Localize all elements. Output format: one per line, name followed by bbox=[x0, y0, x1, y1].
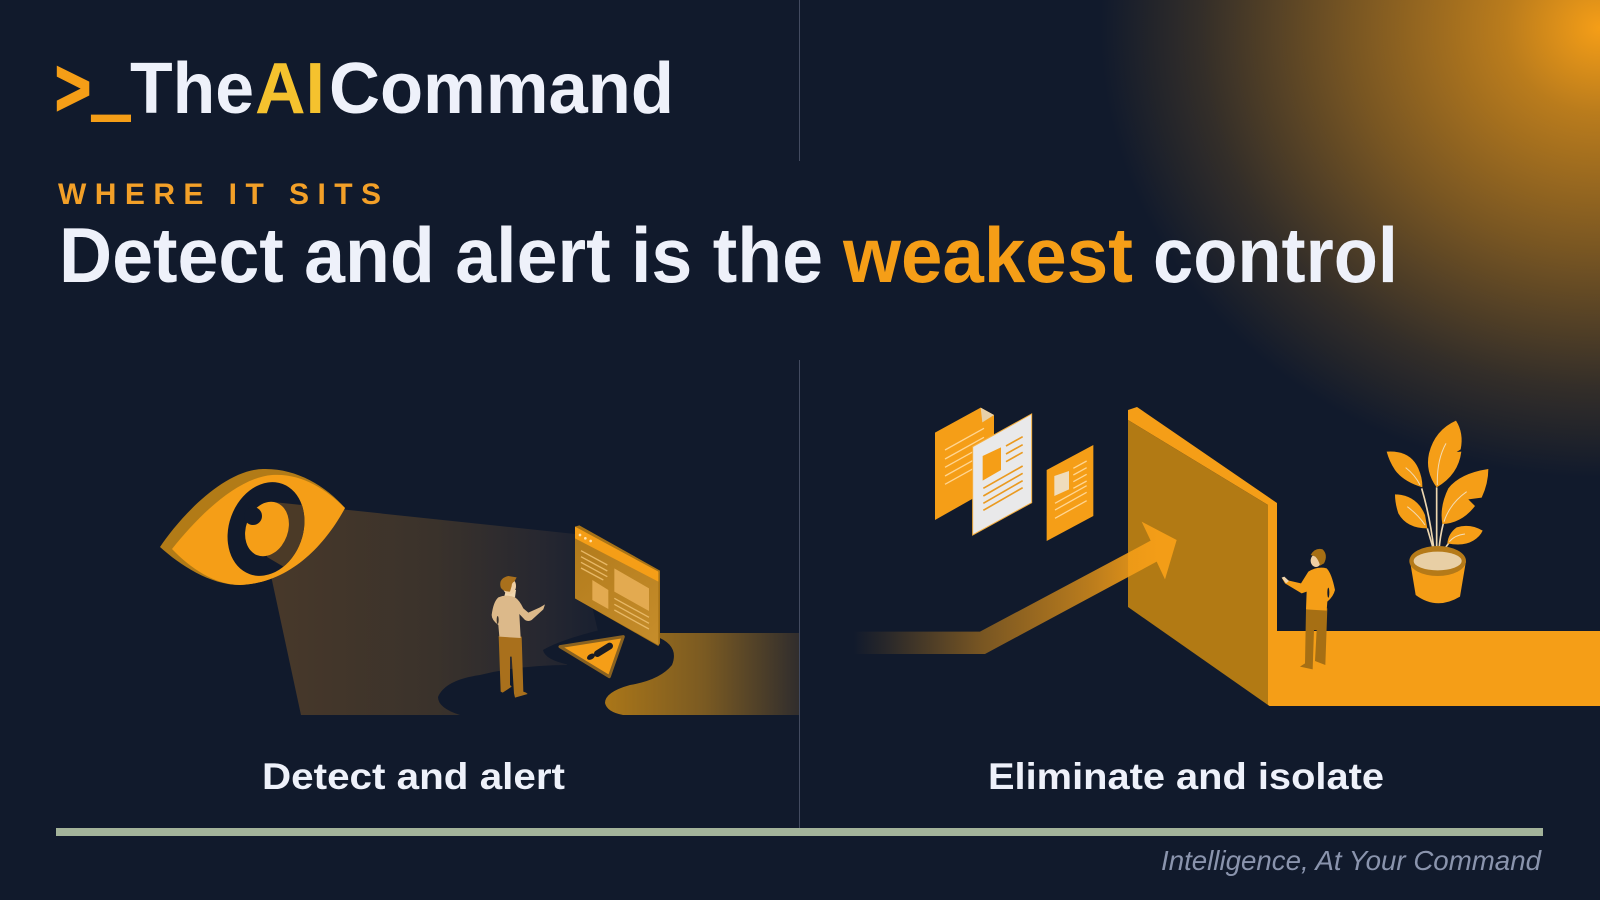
leaf veins bbox=[1406, 443, 1467, 542]
icon: documents bbox=[935, 408, 1093, 541]
document three bbox=[1047, 445, 1093, 541]
icon: potted plant bbox=[1387, 421, 1488, 603]
label: detect and alert: Detect and alert bbox=[262, 756, 565, 797]
logo: > bbox=[55, 43, 91, 132]
ground shadow bbox=[438, 630, 674, 715]
person at wall bbox=[1282, 549, 1335, 669]
icon: browser window bbox=[575, 525, 660, 646]
pot bbox=[1409, 546, 1466, 603]
logo: _ bbox=[92, 29, 130, 129]
icon: eye bbox=[160, 469, 345, 585]
document two bbox=[973, 414, 1032, 535]
blocked arrow bbox=[853, 522, 1177, 654]
title: weakest bbox=[842, 211, 1133, 299]
eyebrow: WHERE IT SITS bbox=[58, 178, 381, 211]
person looking at screen bbox=[492, 576, 545, 698]
title: control bbox=[1153, 211, 1398, 299]
title bbox=[59, 211, 1398, 299]
tagline: Intelligence, At Your Command bbox=[1161, 845, 1542, 876]
icon: warning triangle bbox=[560, 637, 623, 677]
document one bbox=[935, 408, 994, 520]
wall bbox=[1128, 407, 1277, 705]
light beam bbox=[267, 502, 600, 715]
label: eliminate and isolate: Eliminate and isolate bbox=[988, 756, 1384, 797]
logo: The bbox=[130, 49, 254, 129]
floor glow bbox=[605, 633, 799, 715]
logo: AI bbox=[255, 49, 325, 129]
logo: Command bbox=[329, 49, 674, 129]
leaves bbox=[1387, 421, 1488, 545]
illustration: eliminate and isolate bbox=[853, 407, 1600, 706]
safe floor bbox=[1268, 631, 1600, 706]
title: Detect and alert is the bbox=[59, 211, 823, 299]
logo bbox=[55, 29, 674, 132]
divider top bbox=[799, 0, 800, 161]
illustration: detect and alert bbox=[160, 469, 799, 715]
footer rule bbox=[56, 828, 1543, 836]
stems bbox=[1422, 487, 1457, 552]
corner glow bbox=[1000, 0, 1600, 560]
divider bottom bbox=[799, 360, 800, 829]
